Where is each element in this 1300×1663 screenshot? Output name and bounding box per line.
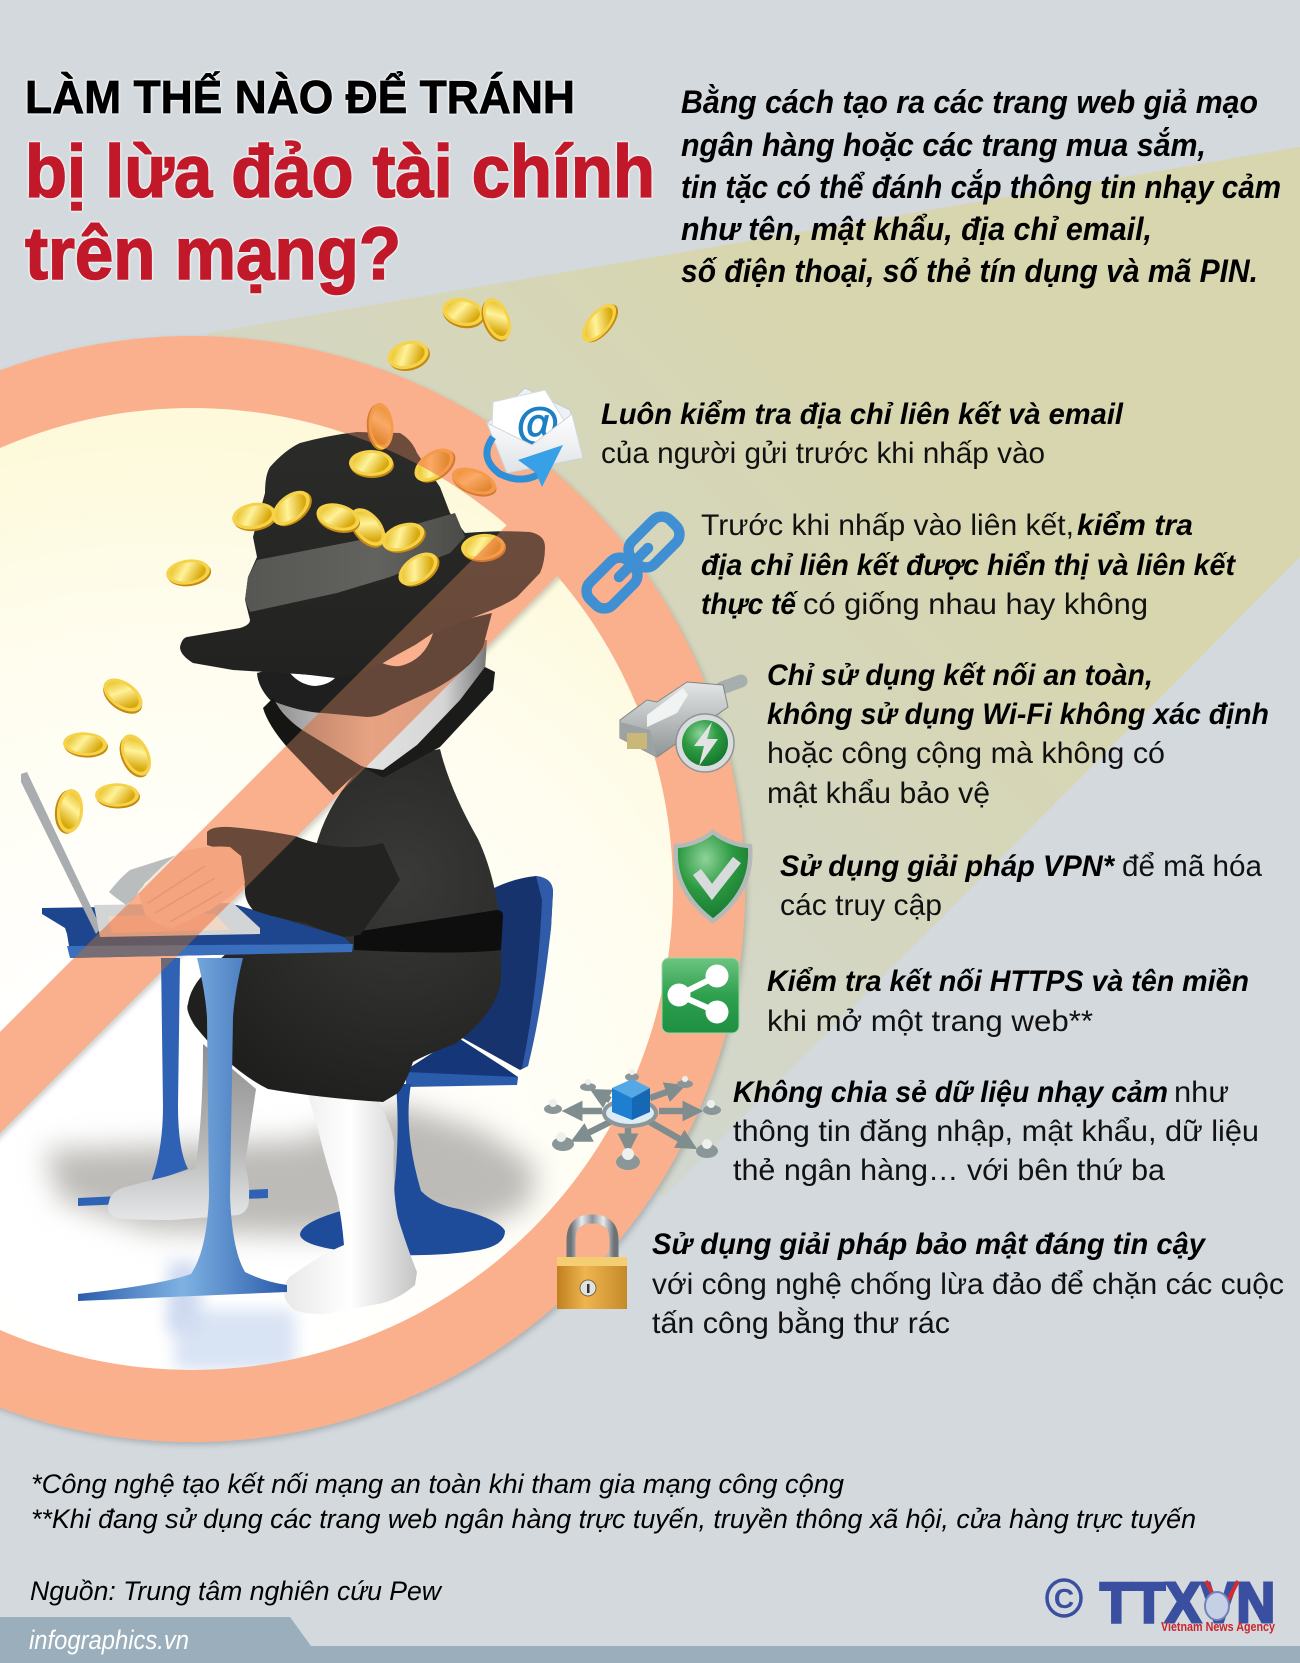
- tip 7: với công nghệ chống lừa đảo để chặn các cuộc: [652, 1268, 1284, 1301]
- source: Nguồn: Trung tâm nghiên cứu Pew: [30, 1576, 442, 1606]
- intro text: như tên, mật khẩu, địa chỉ email,: [681, 211, 1152, 247]
- tip 2: [701, 509, 1237, 621]
- prohibition sign overlay: [0, 336, 745, 1442]
- title line 3: trên mạng?: [25, 212, 401, 295]
- tip 4: để mã hóa: [1122, 850, 1262, 883]
- agency tagline: Vietnam News Agency: [1161, 1619, 1276, 1634]
- icon: chain link: [582, 512, 684, 613]
- tip 3: không sử dụng Wi-Fi không xác định: [767, 698, 1269, 731]
- illustration: hacker at laptop: [21, 294, 624, 1314]
- logo: TTXVN: [1047, 1571, 1276, 1635]
- footnotes: *Công nghệ tạo kết nối mạng an toàn khi tham gia mạng công cộng: [31, 1469, 844, 1499]
- tip 2: kiểm tra: [1077, 509, 1193, 542]
- tip 6: thẻ ngân hàng… với bên thứ ba: [733, 1154, 1165, 1187]
- tip 3: hoặc công cộng mà không có: [767, 737, 1165, 770]
- title: [25, 71, 655, 295]
- copyright mark: C: [1054, 1583, 1074, 1614]
- tip 2: địa chỉ liên kết được hiển thị và liên kết: [701, 549, 1237, 582]
- footnotes: [31, 1469, 1196, 1534]
- title line 2: bị lừa đảo tài chính: [25, 130, 655, 213]
- tip 5: Kiểm tra kết nối HTTPS và tên miền: [767, 965, 1249, 998]
- tip 3: Chỉ sử dụng kết nối an toàn,: [767, 659, 1153, 692]
- tip 2: có giống nhau hay không: [803, 588, 1148, 621]
- chair: [300, 876, 553, 1255]
- left eye: [290, 673, 335, 686]
- tip 7: [652, 1228, 1284, 1340]
- table: [42, 905, 353, 1301]
- tip 7: Sử dụng giải pháp bảo mật đáng tin cậy: [652, 1228, 1206, 1261]
- tip 2: Trước khi nhấp vào liên kết,: [701, 509, 1074, 542]
- icon: network hub: [544, 1069, 721, 1170]
- tip 6: thông tin đăng nhập, mật khẩu, dữ liệu: [733, 1115, 1259, 1148]
- tip 6: [733, 1076, 1259, 1187]
- tip 6: Không chia sẻ dữ liệu nhạy cảm: [733, 1076, 1168, 1109]
- footer site name: infographics.vn: [29, 1625, 189, 1655]
- belt: [354, 910, 503, 952]
- front leg: [284, 1095, 417, 1314]
- hand: [138, 847, 245, 928]
- agency wordmark: TTXVN: [1100, 1571, 1275, 1635]
- icon: share button: [662, 958, 739, 1033]
- right eye: [382, 633, 433, 666]
- prohibition sign base disc: [0, 336, 750, 1448]
- tip 1: của người gửi trước khi nhấp vào: [601, 437, 1045, 470]
- laptop: [21, 772, 260, 937]
- tip 1: Luôn kiểm tra địa chỉ liên kết và email: [601, 398, 1124, 431]
- icon: padlock: [557, 1219, 627, 1309]
- finger lines: [148, 866, 222, 922]
- tip 5: khi mở một trang web**: [767, 1005, 1093, 1038]
- tip 4: các truy cập: [780, 889, 942, 922]
- back hand: [109, 854, 180, 905]
- tip 4: Sử dụng giải pháp VPN*: [780, 850, 1115, 883]
- coins: [53, 294, 624, 835]
- tip 5: [767, 965, 1249, 1038]
- title line 1: LÀM THẾ NÀO ĐỂ TRÁNH: [25, 71, 575, 123]
- tip 7: tấn công bằng thư rác: [652, 1307, 950, 1340]
- copyright mark: [1047, 1580, 1081, 1616]
- collar: [263, 667, 495, 795]
- prohibition sign tint: [0, 403, 672, 1370]
- red V and globe: [1205, 1581, 1238, 1620]
- light beam: [207, 147, 1300, 1198]
- tip 3: [767, 659, 1269, 810]
- footer bar: [0, 1617, 1300, 1663]
- back leg: [108, 1044, 256, 1220]
- tip 2: thực tế: [701, 588, 799, 621]
- tip 4: [780, 850, 1262, 922]
- intro text: Bằng cách tạo ra các trang web giả mạo: [681, 84, 1258, 120]
- intro text: số điện thoại, số thẻ tín dụng và mã PIN.: [681, 253, 1258, 289]
- intro text: [681, 84, 1281, 289]
- tip 1: [601, 398, 1124, 470]
- icon: envelope: @: [517, 399, 559, 448]
- tip 6: như: [1174, 1076, 1229, 1109]
- floor shadow: [45, 1105, 535, 1370]
- intro text: ngân hàng hoặc các trang mua sắm,: [681, 127, 1206, 163]
- icon: shield: [676, 832, 750, 921]
- footnotes: **Khi đang sử dụng các trang web ngân hàng trực tuyến, truyền thông xã hội, cửa hàng trực tuyến: [31, 1504, 1196, 1534]
- icon: network plug: [620, 681, 741, 772]
- back table leg: [78, 958, 268, 1206]
- coat body: [187, 749, 501, 1102]
- mask: [257, 613, 492, 717]
- hat: [180, 432, 545, 677]
- tip 3: mật khẩu bảo vệ: [767, 777, 990, 810]
- face: [273, 640, 487, 778]
- arm sleeve: [207, 827, 400, 937]
- icon: envelope: [487, 388, 583, 487]
